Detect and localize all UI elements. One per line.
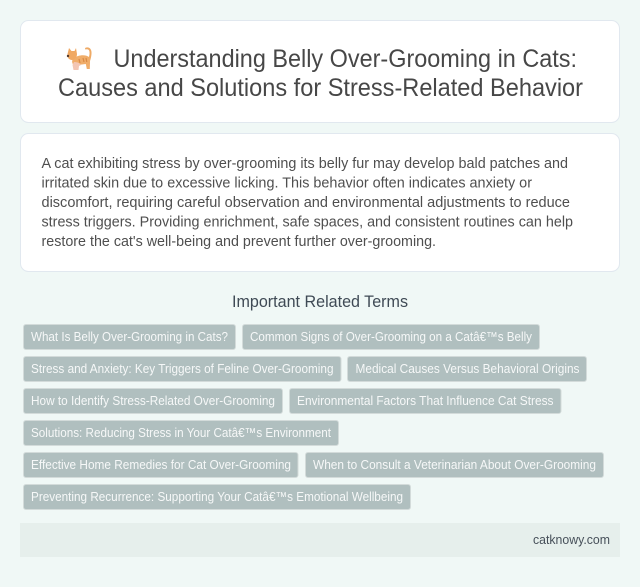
tag <box>24 388 282 414</box>
heading: related terms: Important Related Terms <box>232 293 408 311</box>
panel: related term tags <box>24 324 604 510</box>
tag: Medical Causes Versus Behavioral Origins <box>356 361 580 376</box>
text block: description: A cat exhibiting stress by over-grooming its belly fur may develop bald patches and <box>42 156 568 172</box>
tag <box>24 420 338 446</box>
text block: description: discomfort, requiring careful observation and environmental adjustments to reduce <box>42 195 570 211</box>
footer <box>20 523 620 557</box>
tag: What Is Belly Over-Grooming in Cats? <box>31 329 228 344</box>
tag <box>290 388 561 414</box>
tag <box>24 324 236 350</box>
icon: cat <box>67 47 92 70</box>
tag: Environmental Factors That Influence Cat Stress <box>297 393 554 408</box>
text block: description: stress triggers. Providing enrichment, safe spaces, and consistent routines can help <box>42 215 573 231</box>
text block: description: restore the cat's well-being and prevent further over-grooming. <box>42 234 436 250</box>
tag <box>24 356 341 382</box>
tag <box>24 484 410 510</box>
text block: description: irritated skin due to excessive licking. This behavior often indicates anxiety or <box>42 176 532 192</box>
tag: Effective Home Remedies for Cat Over-Grooming <box>31 457 291 472</box>
tag: Common Signs of Over-Grooming on a Catâ€™s Belly <box>250 329 533 344</box>
tag <box>242 324 540 350</box>
tag: How to Identify Stress-Related Over-Grooming <box>31 393 275 408</box>
tag <box>306 452 604 478</box>
panel: title card <box>20 20 620 122</box>
tag: Stress and Anxiety: Key Triggers of Feline Over-Grooming <box>31 361 334 376</box>
tag: Preventing Recurrence: Supporting Your Catâ€™s Emotional Wellbeing <box>31 489 403 504</box>
title <box>58 46 583 102</box>
title: Understanding Belly Over-Grooming in Cats: <box>114 46 577 73</box>
tag: Solutions: Reducing Stress in Your Catâ€™s Environment <box>31 425 331 440</box>
title: Causes and Solutions for Stress-Related Behavior <box>58 75 583 102</box>
footer: catknowy.com <box>533 532 610 547</box>
tag: When to Consult a Veterinarian About Over-Grooming <box>313 457 596 472</box>
tag <box>348 356 586 382</box>
tag <box>24 452 298 478</box>
panel: description <box>20 134 620 272</box>
text block: description <box>42 156 573 250</box>
